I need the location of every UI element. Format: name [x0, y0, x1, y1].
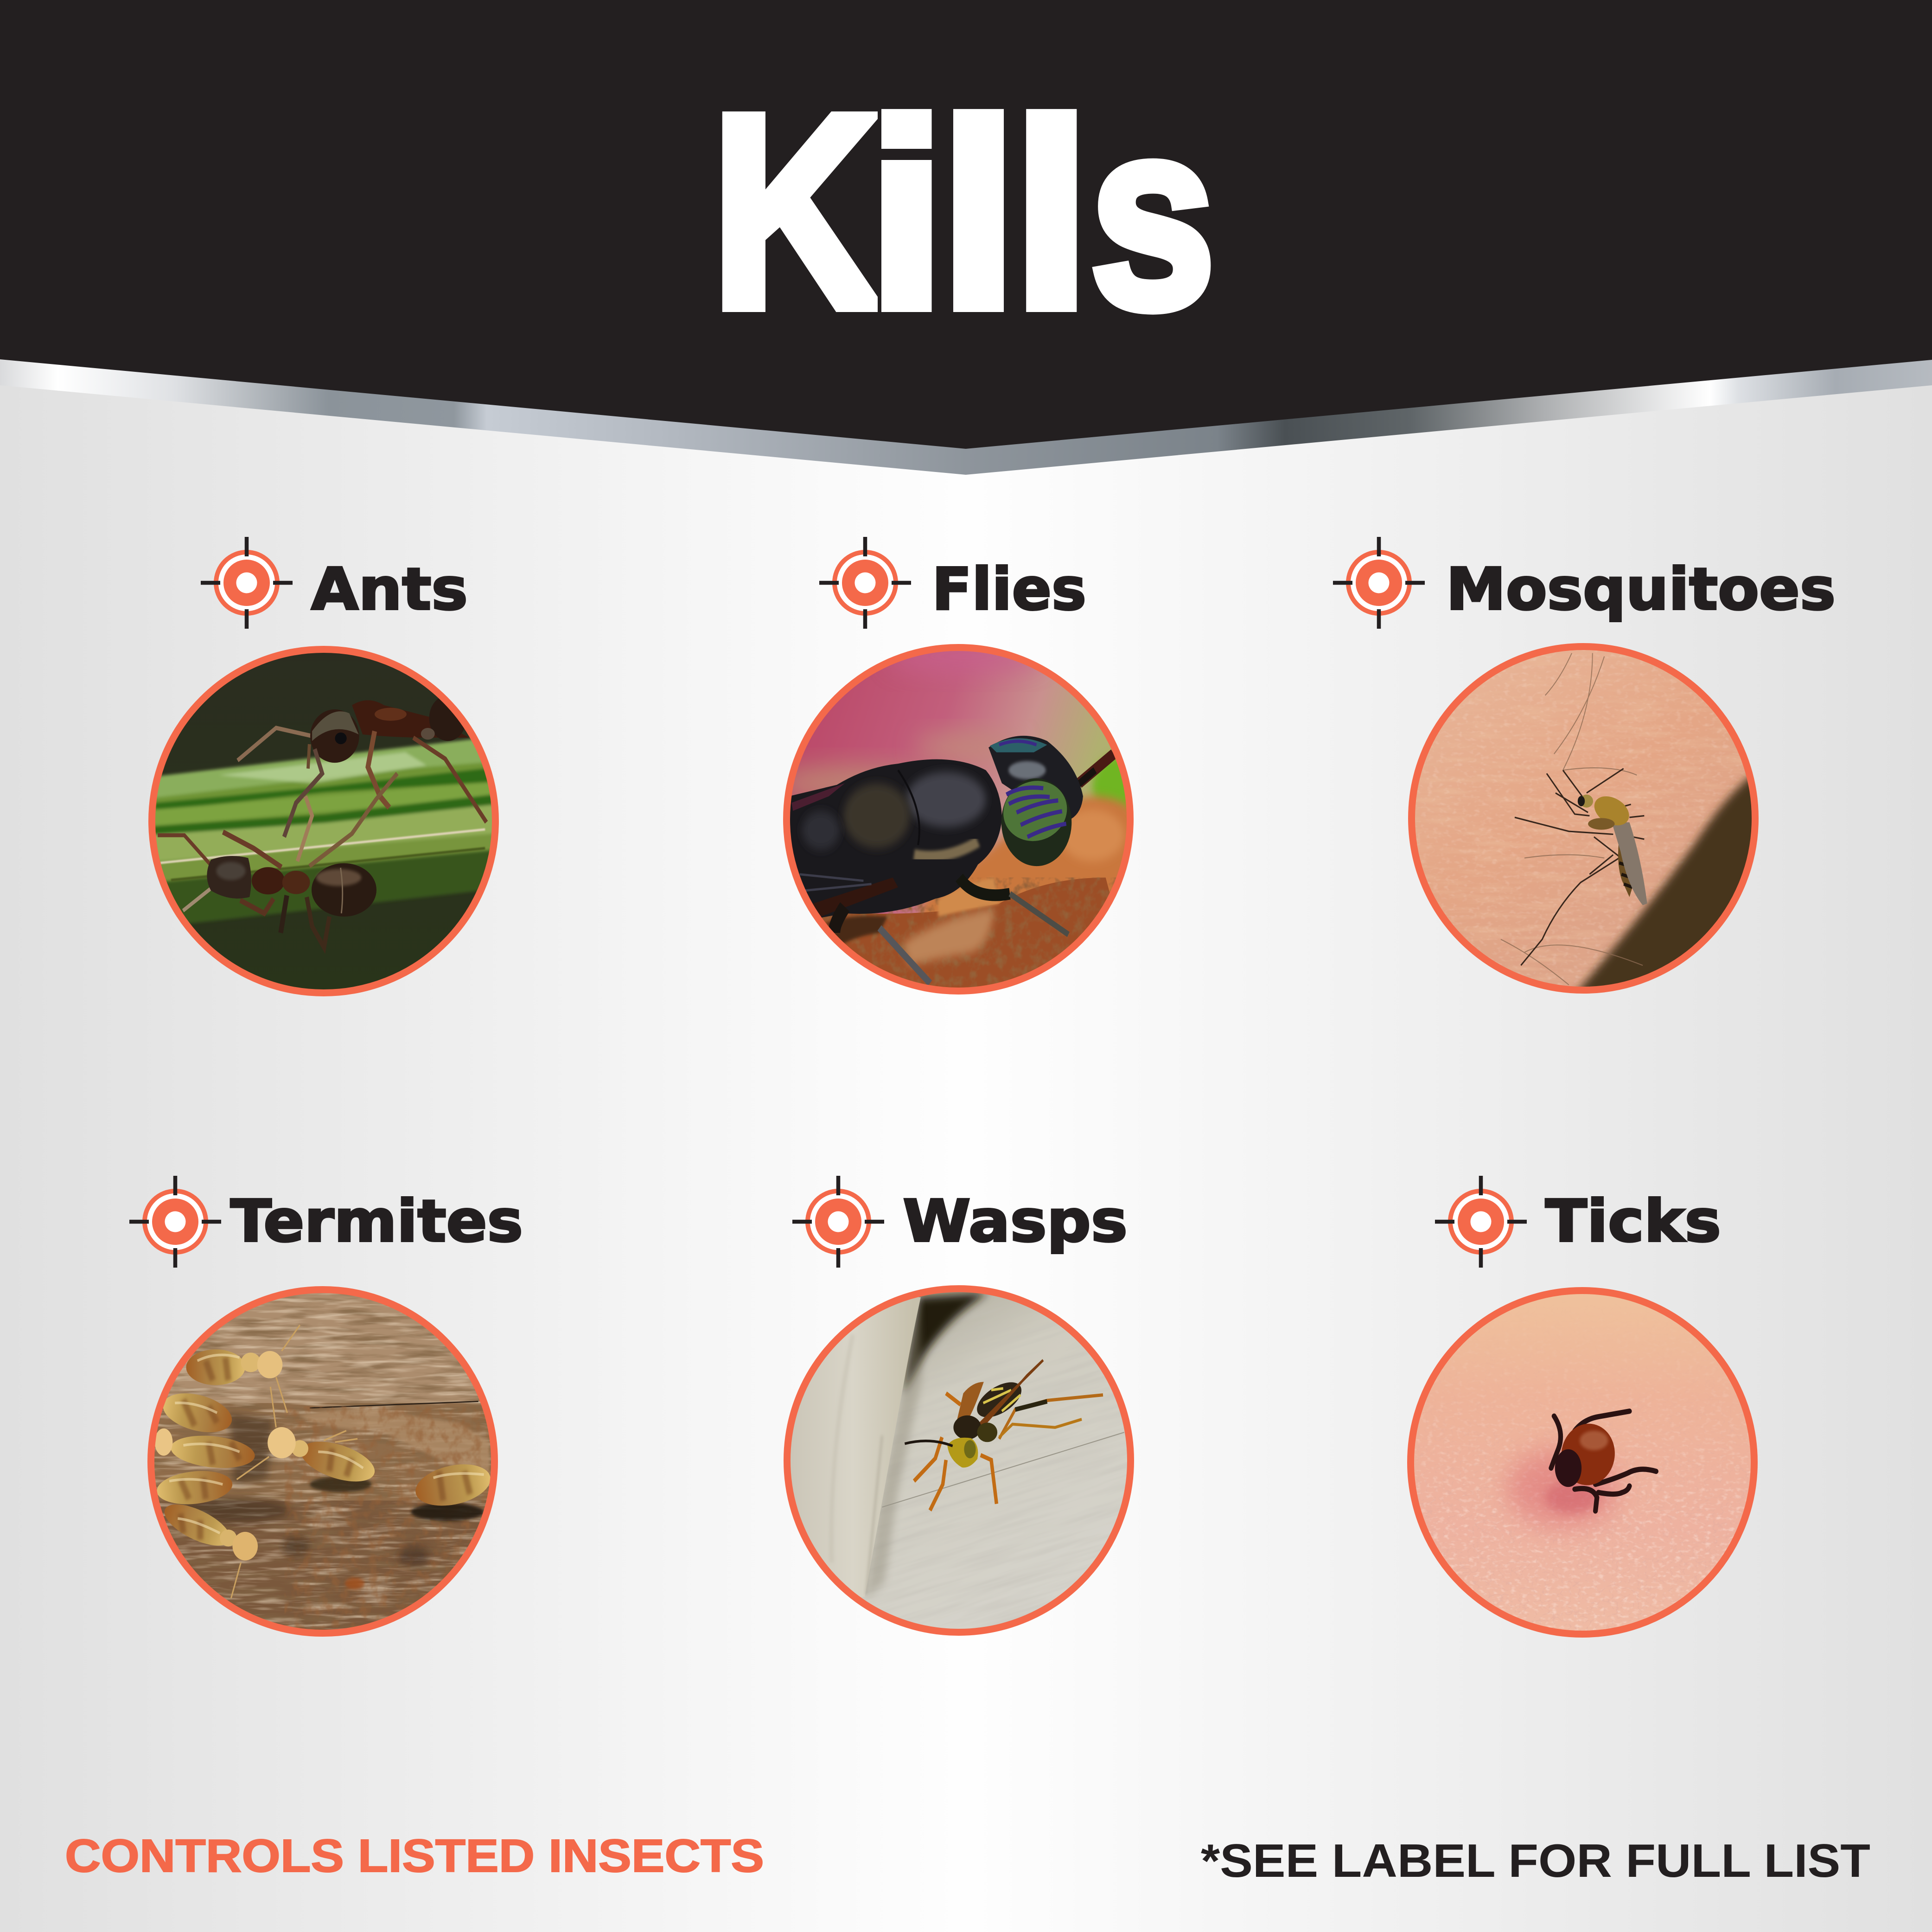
photo: fly on rock [790, 651, 1127, 988]
panel: termites [129, 1176, 523, 1647]
metallic chevron band [0, 357, 1932, 475]
footer: see label note: *SEE LABEL FOR FULL LIST [1201, 1835, 1870, 1887]
header banner [0, 0, 1932, 449]
heading: ants: Ants [311, 556, 468, 623]
panel: mosquitoes [1333, 537, 1836, 1004]
title: ill [878, 78, 1080, 351]
ring [1411, 646, 1755, 990]
tick [1551, 1411, 1656, 1511]
ring [1410, 1291, 1754, 1634]
panel: ticks [1397, 1176, 1770, 1647]
panel: wasps [700, 1173, 1255, 1756]
hairs [1501, 653, 1643, 985]
icon: target [201, 537, 293, 629]
board beam [781, 1283, 921, 1608]
title: s [1090, 67, 1215, 363]
ring [786, 647, 1130, 991]
icon: target [129, 1176, 221, 1268]
panel: flies [783, 537, 1134, 995]
fly body [789, 759, 1068, 983]
photo: tick on skin [1397, 1283, 1770, 1647]
heading: flies: Flies [932, 556, 1086, 623]
heading: mosquitoes: Mosquitoes [1446, 556, 1836, 623]
photo: wasp on wood boards [700, 1173, 1255, 1756]
top ant [237, 695, 486, 837]
ring [787, 1289, 1130, 1632]
photo: mosquito on skin [1397, 640, 1770, 1004]
icon: target [1435, 1176, 1527, 1268]
panel: ants [139, 537, 512, 1004]
ring [152, 649, 495, 993]
title [711, 57, 1215, 365]
fly head and eyes [988, 736, 1114, 872]
bottom ant [158, 773, 397, 948]
photo: termites on wood [144, 1283, 509, 1647]
icon: target [819, 537, 911, 629]
footer: controls listed insects: CONTROLS LISTED INSECTS [65, 1830, 764, 1882]
ring [151, 1290, 494, 1633]
heading: wasps: Wasps [903, 1188, 1128, 1255]
heading: ticks: Ticks [1545, 1188, 1721, 1255]
heading: termites: Termites [230, 1188, 523, 1255]
rock [818, 796, 1138, 998]
termite group [155, 1325, 493, 1598]
icon: target [792, 1176, 884, 1268]
mosquito [1515, 769, 1647, 965]
wasp [905, 1360, 1103, 1511]
icon: target [1333, 537, 1425, 629]
title: K [711, 57, 880, 365]
photo: ants on a green stem [155, 653, 492, 989]
